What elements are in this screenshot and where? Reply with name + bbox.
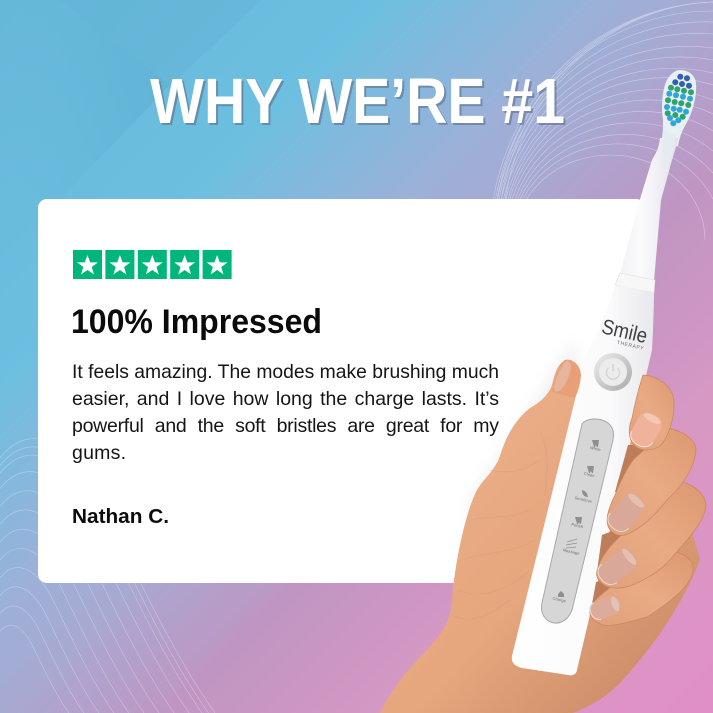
mode panel: White xyxy=(589,445,602,452)
mode panel: Clean xyxy=(583,471,596,478)
pinky finger xyxy=(587,552,693,625)
mode panel: Massage xyxy=(563,547,581,556)
power button xyxy=(594,353,632,391)
brush head xyxy=(660,70,696,146)
review body text: powerful and the soft bristles are great for my xyxy=(72,415,499,437)
review body text: gums. xyxy=(72,442,126,464)
contour lines top right xyxy=(490,2,713,240)
mode panel xyxy=(542,419,613,623)
review card xyxy=(38,199,645,583)
bristles xyxy=(664,74,694,126)
review body text: It feels amazing. The modes make brushing much xyxy=(72,361,499,383)
title: WHY WE’RE #1 xyxy=(152,67,567,139)
middle nail xyxy=(604,490,648,536)
pinky nail xyxy=(587,593,623,623)
mode panel: Charge xyxy=(552,596,567,604)
brush shaft xyxy=(620,138,678,281)
review body text: easier, and I love how long the charge lasts. It’s xyxy=(72,388,499,410)
middle finger xyxy=(604,428,696,536)
title: WHY WE’RE #1 xyxy=(150,65,565,137)
brush collar xyxy=(615,273,655,293)
palm creases and shading xyxy=(452,432,547,619)
brush handle xyxy=(512,285,654,675)
brand logo: THERAPY xyxy=(616,340,645,352)
reviewer name: Nathan C. xyxy=(72,505,169,528)
index nail xyxy=(627,409,665,451)
mode panel: Polish xyxy=(571,522,584,529)
ring finger xyxy=(594,482,706,589)
hand palm xyxy=(380,361,700,713)
contour lines bottom left xyxy=(0,439,215,713)
star rating xyxy=(73,250,232,279)
thumb nail xyxy=(554,361,571,392)
finger gap shadows xyxy=(592,445,650,604)
shaft sleeve xyxy=(662,130,676,166)
shadow on card xyxy=(470,340,590,570)
brand logo: Smile xyxy=(599,315,649,348)
mode panel: Sensitive xyxy=(574,495,593,504)
background facets xyxy=(0,0,262,199)
index finger xyxy=(627,375,674,451)
review heading: 100% Impressed xyxy=(71,303,322,341)
ring nail xyxy=(594,545,640,589)
review body text xyxy=(72,361,499,464)
thumb xyxy=(552,360,581,398)
toothbrush xyxy=(512,70,696,675)
